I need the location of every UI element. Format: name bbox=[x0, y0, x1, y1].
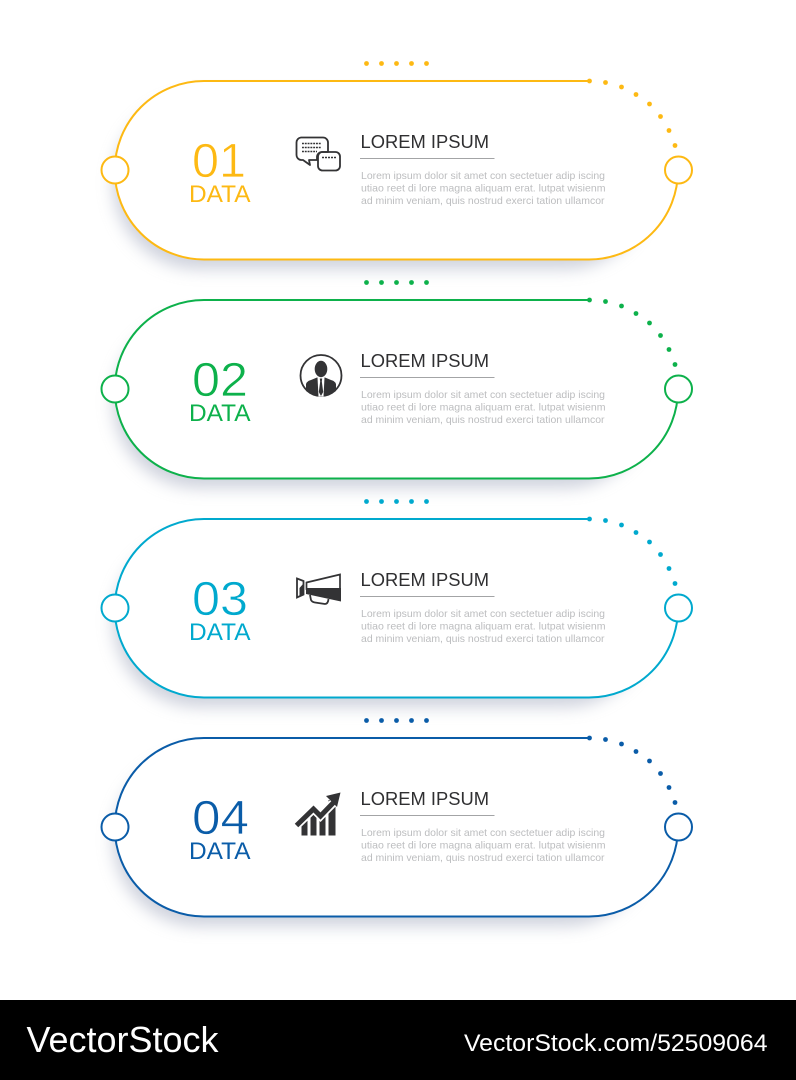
rule 03 bbox=[360, 596, 494, 597]
body text 01: utiao reet di lore magna aliquam erat. lutpat wisienm bbox=[361, 184, 606, 194]
body text 04: utiao reet di lore magna aliquam erat. lutpat wisienm bbox=[361, 840, 606, 852]
body text 02: ad minim veniam, quis nostrud exerci tation ullamcor bbox=[361, 415, 605, 426]
body text 03: ad minim veniam, quis nostrud exerci tation ullamcor bbox=[361, 634, 605, 645]
rule 04 bbox=[360, 815, 494, 816]
body text 03: utiao reet di lore magna aliquam erat. lutpat wisienm bbox=[361, 622, 606, 632]
icon: megaphone bbox=[297, 574, 341, 604]
arc dots 04 bbox=[587, 736, 677, 805]
panel shadow 03 bbox=[113, 535, 651, 707]
panel shadow 01 bbox=[113, 97, 651, 269]
left node 01 bbox=[102, 156, 128, 184]
label DATA 04: DATA bbox=[189, 838, 250, 865]
panel fill 01 bbox=[115, 81, 678, 260]
panel: step 01 bbox=[102, 61, 692, 269]
panel stroke 02 bbox=[115, 300, 678, 478]
footer image id: VectorStock.com/52509064 bbox=[464, 1030, 768, 1057]
panel stroke 04 bbox=[115, 738, 678, 916]
arc dots 02 bbox=[587, 298, 677, 367]
heading 01: LOREM IPSUM bbox=[360, 131, 489, 152]
top dots 03 bbox=[364, 499, 429, 504]
body text 03: Lorem ipsum dolor sit amet con sectetuer adip iscing bbox=[361, 609, 605, 620]
body text 02: utiao reet di lore magna aliquam erat. lutpat wisienm bbox=[361, 402, 606, 414]
top dots 04 bbox=[364, 718, 429, 723]
top dots 02 bbox=[364, 280, 429, 285]
number 01: 01 bbox=[192, 135, 246, 188]
arc dots 03 bbox=[587, 517, 677, 586]
panel stroke 01 bbox=[115, 81, 678, 260]
label DATA 03: DATA bbox=[189, 619, 250, 646]
number 03: 03 bbox=[192, 573, 248, 626]
heading 04: LOREM IPSUM bbox=[360, 788, 489, 809]
top dots 01 bbox=[364, 61, 429, 66]
footer bar bbox=[0, 1000, 796, 1080]
body text 01: ad minim veniam, quis nostrud exerci tation ullamcor bbox=[361, 196, 605, 207]
right node 04 bbox=[665, 814, 692, 840]
panel fill 04 bbox=[115, 738, 678, 916]
icon: speech bubbles bbox=[296, 138, 340, 170]
panel shadow 02 bbox=[113, 316, 651, 488]
right node 01 bbox=[665, 156, 692, 184]
body text 04: Lorem ipsum dolor sit amet con sectetuer adip iscing bbox=[361, 828, 605, 839]
panel: step 04 bbox=[102, 718, 692, 926]
panel fill 03 bbox=[115, 519, 678, 698]
label DATA 01: DATA bbox=[189, 181, 250, 208]
footer logo text: VectorStock bbox=[26, 1019, 219, 1060]
body text 04 bbox=[361, 828, 606, 864]
label DATA 02: DATA bbox=[189, 400, 250, 427]
icon: businessman bbox=[300, 355, 342, 396]
right node 02 bbox=[665, 376, 692, 402]
heading 02: LOREM IPSUM bbox=[360, 350, 489, 371]
body text 01: Lorem ipsum dolor sit amet con sectetuer adip iscing bbox=[361, 171, 605, 182]
panel: step 03 bbox=[102, 499, 692, 707]
right node 03 bbox=[665, 594, 692, 622]
left node 02 bbox=[102, 376, 128, 402]
number 02: 02 bbox=[192, 354, 248, 407]
panel: step 02 bbox=[102, 280, 692, 488]
icon: growth chart bbox=[296, 792, 340, 836]
panel shadow 04 bbox=[113, 754, 651, 926]
left node 03 bbox=[102, 594, 128, 622]
rule 02 bbox=[360, 377, 494, 378]
panel stroke 03 bbox=[115, 519, 678, 698]
body text 02 bbox=[361, 390, 606, 426]
body text 02: Lorem ipsum dolor sit amet con sectetuer adip iscing bbox=[361, 390, 605, 401]
body text 03 bbox=[361, 609, 606, 645]
number 04: 04 bbox=[192, 792, 249, 845]
rule 01 bbox=[360, 158, 494, 159]
left node 04 bbox=[102, 814, 128, 840]
arc dots 01 bbox=[587, 79, 677, 148]
body text 04: ad minim veniam, quis nostrud exerci tation ullamcor bbox=[361, 853, 605, 864]
body text 01 bbox=[361, 171, 606, 207]
heading 03: LOREM IPSUM bbox=[360, 569, 489, 590]
panel fill 02 bbox=[115, 300, 678, 478]
